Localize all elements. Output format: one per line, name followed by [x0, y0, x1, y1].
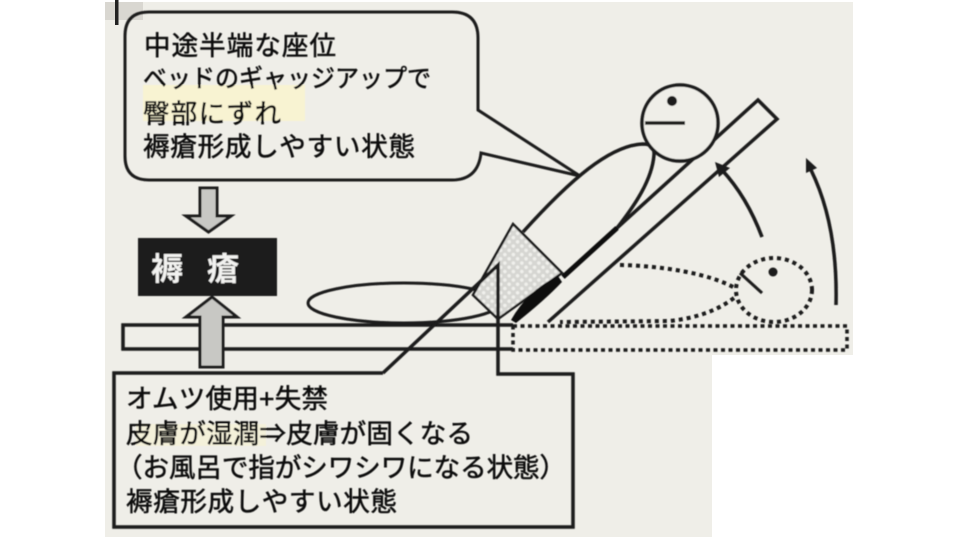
lower callout text: 皮膚が湿潤⇒皮膚が固くなる [126, 419, 473, 449]
contact stroke along back rest [563, 228, 617, 277]
bed: raised back section [548, 100, 777, 322]
seated person head [642, 85, 718, 161]
dotted bed: flat position [513, 326, 847, 350]
callout text: 臀部にずれ [143, 99, 281, 129]
seated person torso [523, 144, 654, 232]
highlight: lower text [136, 424, 266, 446]
arrow: outer curved raise [806, 158, 836, 305]
callout text [143, 31, 431, 162]
lower callout text: オムツ使用+失禁 [126, 384, 328, 414]
shaded pressure area on buttocks [473, 224, 562, 319]
dotted lying person [560, 258, 812, 322]
lying person face [740, 268, 778, 293]
arrow: callout down to pressure sore [186, 188, 231, 232]
callout text: ベッドのギャッジアップで [143, 65, 431, 93]
black pressure contact zone [511, 276, 562, 323]
callout text: 中途半端な座位 [144, 31, 336, 61]
arrow: up to pressure sore [186, 297, 237, 367]
lower callout text [116, 384, 566, 517]
lower callout text: （お風呂で指がシワシワになる状態） [116, 453, 566, 483]
label box: pressure sore: 褥 [151, 251, 183, 287]
label box: pressure sore [138, 238, 277, 296]
callout text: 褥瘡形成しやすい状態 [143, 132, 415, 162]
arrow: inner curved raise [715, 162, 762, 237]
label box: pressure sore: 瘡 [207, 251, 239, 287]
scan smudge and margin bar [105, 0, 143, 25]
bed: flat section [123, 325, 513, 349]
callout: diaper use and incontinence [114, 265, 573, 527]
callout: half-sitting position [125, 12, 580, 180]
paper background [105, 2, 853, 537]
legs ellipse [308, 283, 500, 323]
highlight: upper text [143, 85, 305, 121]
lower callout text: 褥瘡形成しやすい状態 [126, 487, 397, 517]
